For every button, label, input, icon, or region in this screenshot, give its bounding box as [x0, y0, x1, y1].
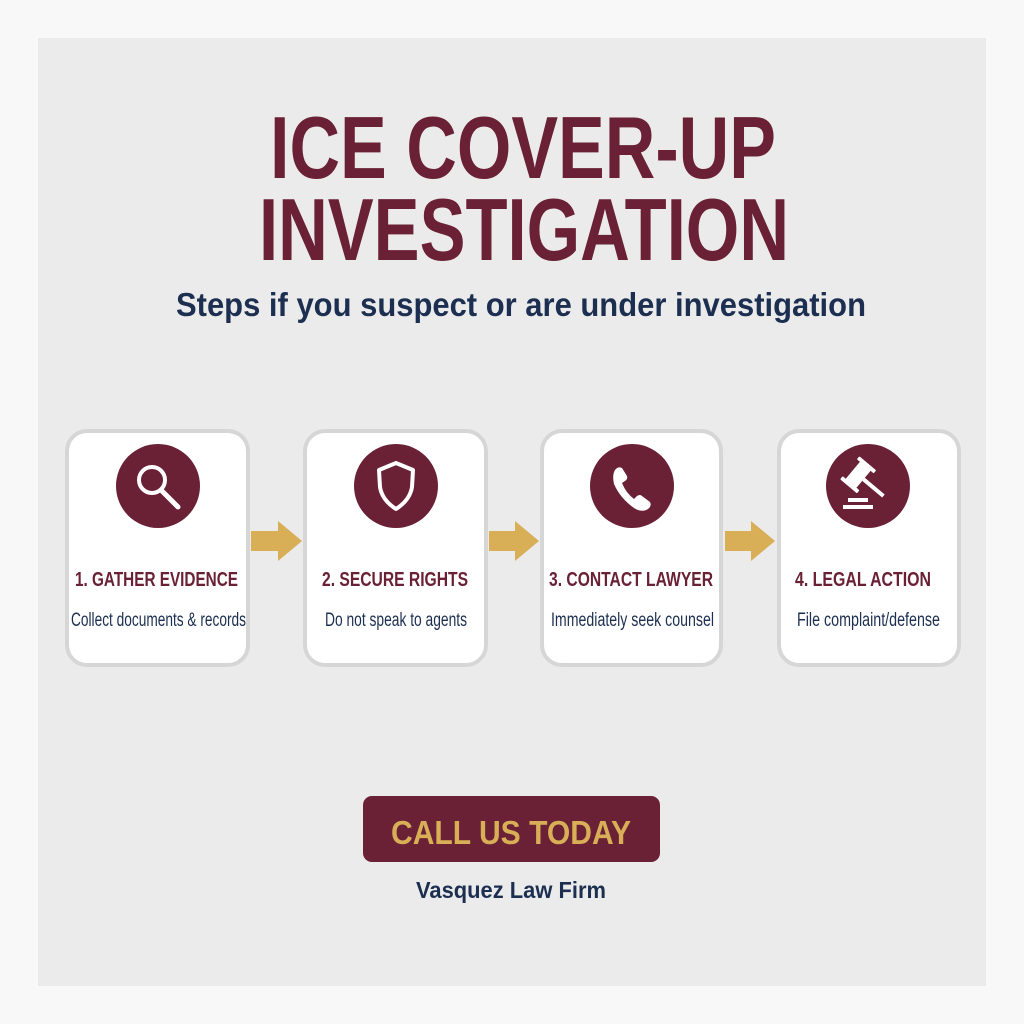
subtitle: Steps if you suspect or are under investigation	[176, 286, 866, 323]
title: ICE COVER-UP	[270, 98, 776, 197]
button: call us today	[363, 796, 660, 862]
icon: gavel	[826, 444, 910, 528]
icon: magnifier	[116, 444, 200, 528]
firm name: Vasquez Law Firm	[416, 877, 606, 903]
card 1: gather evidence: Collect documents & records	[71, 610, 246, 631]
card 4: legal action: 4. LEGAL ACTION	[795, 569, 931, 591]
card 3: contact lawyer	[542, 431, 721, 665]
arrow 1	[251, 521, 302, 561]
card 2: secure rights: Do not speak to agents	[325, 610, 467, 631]
card 4: legal action	[779, 431, 959, 665]
card 2: secure rights: 2. SECURE RIGHTS	[322, 569, 468, 591]
icon: shield	[354, 444, 438, 528]
title	[259, 98, 789, 279]
card 1: gather evidence	[67, 431, 248, 665]
card 2: secure rights	[305, 431, 486, 665]
title: INVESTIGATION	[259, 180, 789, 279]
card 3: contact lawyer: Immediately seek counsel	[551, 610, 714, 631]
button: call us today: CALL US TODAY	[391, 814, 631, 851]
card 4: legal action: File complaint/defense	[797, 610, 940, 631]
arrow 2	[489, 521, 539, 561]
arrow 3	[725, 521, 775, 561]
card 3: contact lawyer: 3. CONTACT LAWYER	[549, 569, 713, 591]
icon: phone	[590, 444, 674, 528]
card 1: gather evidence: 1. GATHER EVIDENCE	[75, 569, 238, 591]
